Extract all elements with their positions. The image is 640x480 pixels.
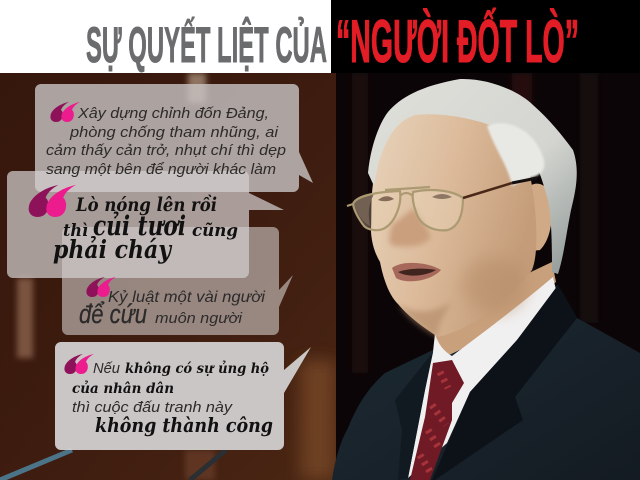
header: white band [0,0,331,73]
cheek shading [463,257,527,313]
face [371,109,536,337]
text: SỰ QUYẾT LIỆT CỦA [86,16,327,73]
background: blue microphone stems [0,450,226,480]
shirt collar [408,277,556,478]
glasses [347,178,537,230]
speech bubble 1 quote text: sang một bên để người khác làm [46,161,276,178]
quote text: Lò nóng lên rồi [75,194,217,216]
tie pattern [420,372,448,475]
quote text [72,360,273,437]
speech bubble 1 quote text: cảm thấy cản trở, nhụt chí thì dẹp [46,142,286,159]
icon: quote mark [29,185,76,217]
teeth [398,269,436,276]
mouth [392,263,441,281]
portrait of the speaker [332,79,640,480]
ear [527,184,552,250]
speech bubble 1 quote text: Xây dựng chỉnh đốn Đảng, [77,105,269,122]
speech bubble 2 content [29,185,238,264]
speech bubble 1 quote text [46,105,286,178]
quote text: để cứu [79,299,147,329]
eyes [378,194,452,201]
speech bubble 4 [55,342,311,450]
speech bubble 1 quote text: phòng chống tham nhũng, ai [69,124,279,141]
quote text: Nếu [93,360,121,377]
quote text: không thành công [95,413,273,437]
quote text: cũng [192,221,238,241]
white hair at temple [487,123,544,186]
speech bubble 1 shape [35,84,313,192]
necktie [410,360,464,480]
quote text: không có sự ủng hộ [125,360,269,377]
neck [430,262,556,357]
icon: quote mark [64,354,94,374]
left lens shadow [354,194,374,226]
hair [368,79,577,274]
suit lapel [432,285,577,480]
background: brown left panel [0,73,336,480]
quote text: của nhân dân [72,380,174,397]
icon: quote mark [50,102,80,122]
suit jacket [332,285,640,480]
quote text: Kỷ luật một vài người [108,289,265,306]
speech bubble 2 shape [7,171,284,278]
left lapel [395,352,433,480]
speech bubble 3 shape [62,227,293,335]
bubble shape [55,342,311,450]
background: dark right panel [336,73,640,480]
quote text [53,194,238,264]
header: black band [331,0,640,73]
quote text: củi tươi [93,210,186,242]
icon: quote mark [86,277,116,297]
quote text: phải cháy [53,235,172,264]
quote text: muôn người [155,310,243,327]
quote text [79,289,265,329]
chin shadow [398,302,452,337]
quote text: thì [63,221,88,241]
nose shading [389,208,431,247]
quote text: thì cuộc đấu tranh này [72,399,234,416]
speech bubble 3 content [79,277,265,329]
